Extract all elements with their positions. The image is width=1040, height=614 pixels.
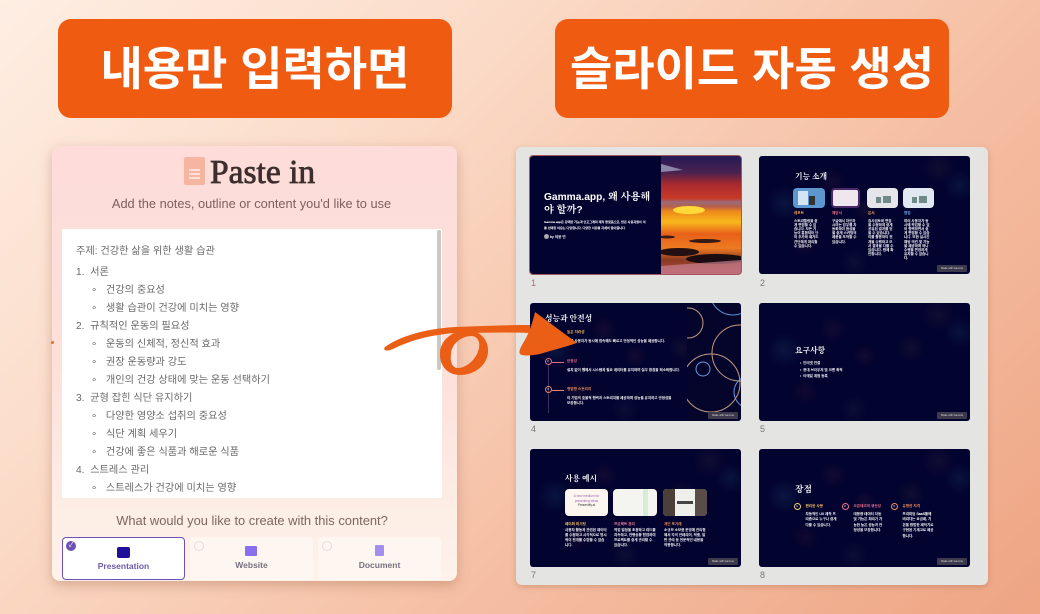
outline bullet: ∘ 건강의 중요성 — [91, 285, 165, 296]
column 2: 구글에서 자인하시려는 업무를 자동화하여 완성물을 쉽게 스키밍의 제품을 포착할 수 있습니다. — [832, 218, 856, 244]
question: What would you like to create with this content? — [116, 513, 388, 528]
number 2 — [544, 358, 552, 365]
item 1: 자동적인 UX 제작 프리즘으로 누구나 쉽게 다룰 수 있습니다. — [806, 512, 836, 526]
outline bullet: ∘ 스트레스가 건강에 미치는 영향 — [91, 483, 236, 494]
card image: text: Presentify.ai — [578, 503, 595, 507]
column 4: 협업 — [904, 210, 911, 214]
outline item 4: 4. 스트레스 관리 — [76, 465, 149, 476]
item 3: 영업형 스토리지 — [567, 387, 591, 391]
column 2: 작업 일정을 조정하고 리드를 지속하고, 진행상황 협업하여 프로젝트를 쉽게 관리할 수 있습니다. — [614, 528, 656, 546]
column 1: 페이퍼 미기팅 — [565, 522, 586, 526]
label: Presentation — [98, 561, 149, 571]
icon: monitor — [245, 546, 257, 556]
author — [544, 234, 566, 239]
item 1 — [567, 330, 665, 343]
item 2 — [842, 503, 882, 532]
item 3: 이 기업의 효율적 협력과 스토리지를 제공하며 성능을 유지하고 안정성을 보장합니다. — [567, 396, 671, 405]
item 3 — [891, 503, 934, 538]
badge: Made with Gamma — [712, 414, 734, 417]
item 1: 많은 사용자가 동시에 접속해도 빠르고 안정적인 성능을 제공합니다. — [567, 339, 665, 343]
slide number 5: 5 — [760, 424, 765, 434]
panel subtitle: Add the notes, outline or content you'd like to use — [112, 196, 391, 211]
heading: auto slides: 슬라이드 자동 생성 — [570, 43, 934, 95]
check mark: ✓ — [69, 542, 73, 549]
slide number 1: 1 — [531, 278, 536, 288]
card image: text: A new medium for — [574, 494, 599, 498]
slide title: 장점 — [795, 484, 812, 494]
item 2: 오픈테크의 생산성 — [854, 504, 881, 508]
slide number 7: 7 — [531, 570, 536, 580]
item 2: 안정성 — [567, 359, 577, 363]
item 1 — [794, 503, 836, 527]
panel title: Paste in — [210, 154, 315, 191]
text area: outline — [62, 229, 442, 498]
outline bullet: ∘ 다양한 영양소 섭취의 중요성 — [91, 411, 227, 422]
column 2: 프로젝트 관리 — [614, 522, 635, 526]
outline topic: 주제: 건강한 삶을 위한 생활 습관 — [76, 246, 215, 257]
label: Website — [235, 560, 268, 570]
bullet list — [800, 360, 842, 378]
slide 1 — [530, 156, 741, 274]
card image: photo — [663, 489, 707, 516]
column 3: 개인 포기레 — [664, 522, 682, 526]
option: website — [190, 537, 313, 580]
badge — [937, 265, 967, 272]
slide number 2: 2 — [760, 278, 765, 288]
badge — [708, 558, 738, 565]
icon: document — [184, 157, 205, 185]
number 1 — [794, 502, 800, 510]
card image — [903, 188, 934, 208]
badge: Made with Gamma — [712, 560, 734, 563]
item 2: 설치 없이 웹에서 시스템과 필요 데이터를 유지하며 실무 환경을 최소화합니다. — [567, 368, 680, 372]
number 2: 2 — [844, 504, 846, 508]
bullet list: • 이메일 계정 등록 — [800, 374, 828, 378]
heading: paste content: 내용만 입력하면 — [100, 43, 410, 95]
card image: text: presenting ideas — [575, 499, 598, 503]
slide title: 기능 소개 — [795, 172, 827, 180]
icon: presentation — [117, 547, 130, 558]
badge: Made with Gamma — [941, 560, 963, 563]
heading: paste content — [58, 19, 452, 118]
number 3: 3 — [893, 504, 895, 508]
card image: text — [565, 489, 608, 516]
option: presentation — [62, 537, 185, 580]
item 1: 높은 처리성 — [567, 330, 585, 334]
number 3 — [544, 386, 552, 393]
slide title: 성능과 안전성 — [545, 314, 592, 322]
outline bullet: ∘ 생활 습관이 건강에 미치는 영향 — [91, 303, 239, 314]
item 2 — [545, 358, 680, 372]
item 3: 유명한 지격 — [902, 504, 920, 508]
card image — [867, 188, 898, 208]
number 1: 1 — [796, 504, 798, 508]
icon: document — [375, 545, 384, 556]
column 1: 사용자 활동과 관련된 데이터를 수정하고 시각적으로 명시적이 전개를 수립할 수 있습니다. — [565, 528, 607, 546]
card image — [831, 188, 860, 208]
number 3 — [890, 502, 898, 510]
badge: Made with Gamma — [941, 267, 963, 270]
slide 8 — [759, 449, 970, 567]
slide number 4: 4 — [531, 424, 536, 434]
slide 5 — [759, 303, 970, 421]
badge — [708, 412, 738, 419]
column 3: 검사검토와 편집을 수정하여 쉽게 공유된 결과를 얻을 수 있습니다. 이를 활용하여 전개물 수행하고 모서 결과물 다룰 수 있습니다. 함께 확인합니다. — [868, 218, 893, 256]
slide 7 — [530, 449, 741, 567]
author: by 허윤 민 — [550, 235, 566, 239]
column 3: 문서 — [868, 210, 875, 214]
slide title: Gamma.app, 왜 사용해 — [544, 192, 650, 203]
slide title: 요구사항 — [795, 346, 825, 354]
column 1: 레포트 — [794, 210, 804, 214]
slide title — [544, 191, 650, 216]
item 1: 편리한 사용 — [806, 504, 823, 508]
outline bullet: ∘ 식단 계획 세우기 — [91, 429, 177, 440]
column 4: 여러 사용자가 동시에 작업할 수 있어 협력하면서 쉽게 편집할 수 있습니다. 또한 실시간 채팅 의견 및 기능을 제공하며 하나 수행을 편집하게 유지할 수 있습니다. — [904, 218, 929, 260]
slide number 8: 8 — [760, 570, 765, 580]
photo: sunset — [661, 156, 741, 274]
badge — [937, 558, 967, 565]
side marker — [51, 341, 54, 344]
slide title: 야 할까? — [544, 205, 583, 216]
outline bullet: ∘ 건강에 좋은 식품과 해로운 식품 — [91, 447, 239, 458]
heading: auto slides — [555, 19, 949, 118]
check mark — [66, 541, 76, 551]
bullet list: • 인터넷 연결 — [800, 361, 820, 365]
outline item 1: 1. 서론 — [76, 267, 109, 278]
outline item 2: 2. 규칙적인 운동의 필요성 — [76, 321, 190, 332]
item 2: 대용량 데이터 자동 및 기능은 처리가 가능한 높은 성능과 안정성을 보장합니다. — [854, 512, 882, 532]
item 3: 프리미엄 SaaS툴에 비리다는 요금제, 기본을 합법한 제작기로 구현된 기계고로 제공합니다. — [902, 512, 933, 538]
number 3: 3 — [547, 387, 549, 391]
outline bullet: ∘ 권장 운동량과 강도 — [91, 357, 187, 368]
outline item 3: 3. 균형 잡힌 식단 유지하기 — [76, 393, 192, 404]
card image — [793, 188, 825, 208]
column 2: 제안서 — [832, 210, 842, 214]
slide text: Gamma.app은 강력한 기능과 인포그래픽 제작 플랫폼으로, 많은 사용자들이 이를 선택한 이유는 다양합니다. 다양한 이유를 자세히 알아봅니다. — [544, 220, 646, 230]
slide title: 사용 예시 — [565, 474, 597, 482]
column 1: 스토리텔링을 쉽게 편집할 수 있습니다. 모든 기능이 통합되어 단어 추가와 제거도 간단하게 처리할 수 있습니다. — [794, 218, 818, 248]
scrollbar — [437, 230, 441, 370]
item 3 — [545, 386, 672, 405]
slide 4 — [530, 303, 741, 421]
decorative side panel — [687, 303, 741, 421]
outline bullet: ∘ 개인의 건강 상태에 맞는 운동 선택하기 — [91, 375, 270, 386]
panel: paste in — [52, 146, 457, 581]
bullet list: • 현대 브라우저 및 크롬 최적 — [800, 368, 842, 372]
timeline line — [548, 365, 549, 413]
slide 2 — [759, 156, 970, 274]
panel: slide overview — [516, 147, 988, 585]
badge: Made with Gamma — [941, 414, 963, 417]
badge — [937, 412, 967, 419]
option: document — [318, 537, 441, 580]
number 2 — [842, 502, 848, 510]
card image: table — [613, 489, 657, 516]
outline bullet: ∘ 운동의 신체적, 정신적 효과 — [91, 339, 220, 350]
number 2: 2 — [547, 359, 549, 363]
column 3: 소규모 소모품 운영에 관리합에서 각의 인테리어, 작품, 일반 관리 등 전문적인 내용을 작용합니다. — [664, 528, 706, 546]
label: Document — [359, 560, 400, 570]
